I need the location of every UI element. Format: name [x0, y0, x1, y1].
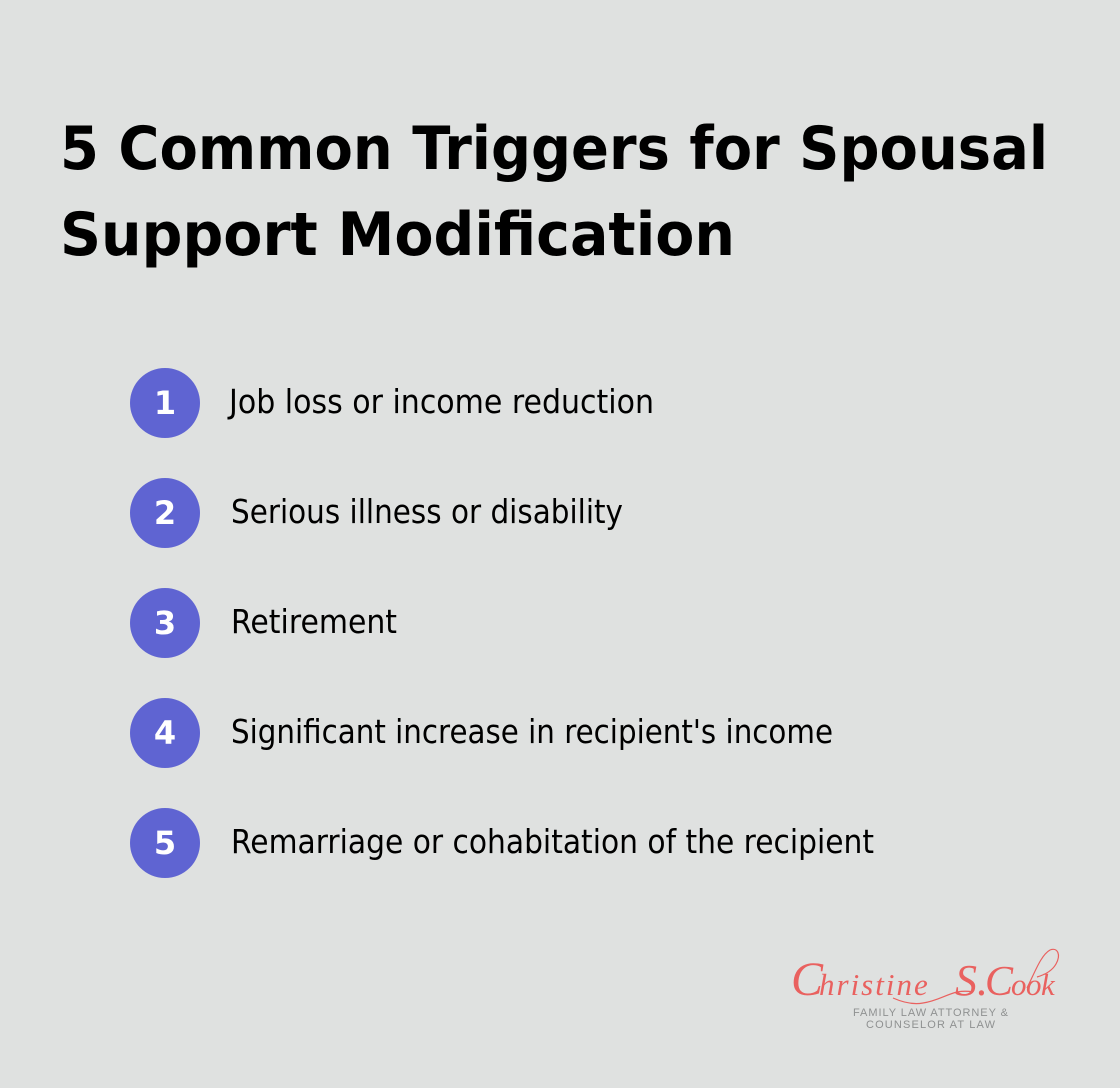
- item 2: Serious illness or disability: [231, 492, 623, 531]
- item 5: Remarriage or cohabitation of the recipient: [231, 822, 874, 861]
- logo: Christine S. Cook: hristine: [819, 967, 930, 1002]
- item 1: [130, 368, 654, 438]
- item 3: [130, 588, 397, 658]
- title: 5 Common Triggers for Spousal: [60, 114, 1048, 184]
- logo: Christine S. Cook: COUNSELOR AT LAW: [866, 1019, 996, 1031]
- logo: Christine S. Cook: C: [985, 959, 1014, 1005]
- logo: Christine S. Cook: [791, 949, 1058, 1031]
- title: Support Modification: [60, 200, 735, 270]
- item 2: 2: [154, 494, 176, 532]
- item 4: [130, 698, 833, 768]
- title: [60, 114, 1048, 270]
- item 3: Retirement: [231, 602, 397, 641]
- logo: Christine S. Cook: C: [791, 953, 824, 1006]
- item 5: 5: [154, 824, 176, 862]
- list of triggers: [130, 368, 874, 878]
- item 3: 3: [154, 604, 176, 642]
- logo: Christine S. Cook: FAMILY LAW ATTORNEY &: [853, 1007, 1009, 1019]
- item 1: 1: [154, 384, 176, 422]
- logo: Christine S. Cook: ook: [1011, 967, 1056, 1002]
- logo: Christine S. Cook: S.: [955, 956, 988, 1005]
- item 4: 4: [154, 714, 176, 752]
- item 2: [130, 478, 623, 548]
- item 5: [130, 808, 874, 878]
- item 4: Significant increase in recipient's income: [231, 712, 833, 751]
- item 1: Job loss or income reduction: [227, 382, 654, 421]
